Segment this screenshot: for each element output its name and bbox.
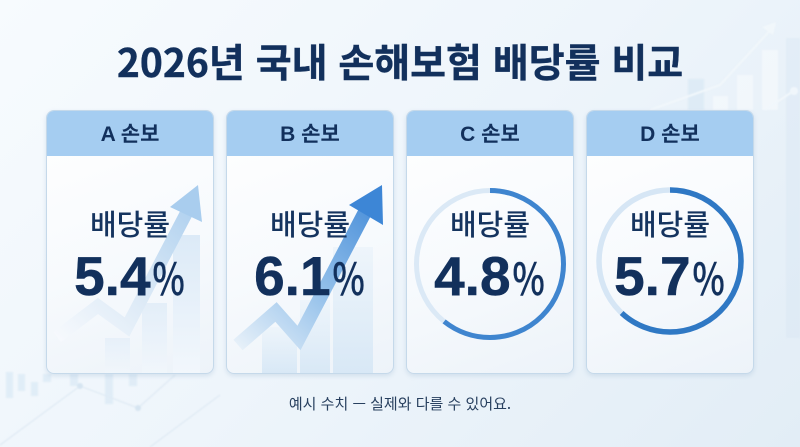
value: 5.4	[74, 245, 151, 307]
label: 배당률	[630, 202, 710, 244]
chart: rising arrow A	[79, 185, 202, 346]
chart: rising arrow B	[234, 185, 383, 373]
value	[434, 244, 544, 308]
chart: progress ring C	[414, 188, 566, 340]
value	[74, 244, 184, 308]
value	[614, 244, 724, 308]
chart: progress ring D	[596, 187, 744, 335]
header	[586, 110, 754, 156]
panel: D 손보	[586, 110, 754, 374]
header	[226, 110, 394, 156]
value: %	[692, 244, 724, 308]
value	[254, 244, 364, 308]
label: 배당률	[270, 202, 350, 244]
header	[46, 110, 214, 156]
footnote: 예시 수치 — 실제와 다를 수 있어요.	[289, 393, 511, 414]
label: 배당률	[450, 202, 530, 244]
header	[406, 110, 574, 156]
value: %	[332, 244, 364, 308]
panel: B 손보	[226, 110, 394, 374]
value: 5.7	[614, 245, 691, 307]
panel: C 손보	[406, 110, 574, 374]
panel: A 손보	[46, 110, 214, 374]
value: %	[152, 244, 184, 308]
title: 2026년 국내 손해보험 배당률 비교	[117, 33, 683, 89]
label: 배당률	[90, 202, 170, 244]
value: 4.8	[434, 245, 511, 307]
value: %	[512, 244, 544, 308]
header: B 손보	[280, 123, 340, 146]
header: A 손보	[101, 123, 159, 146]
header: C 손보	[460, 123, 520, 146]
header: D 손보	[640, 123, 700, 146]
value: 6.1	[254, 245, 331, 307]
